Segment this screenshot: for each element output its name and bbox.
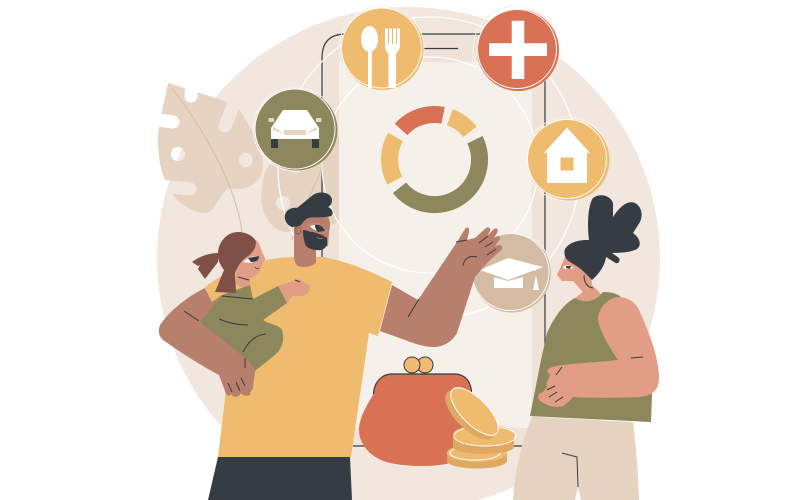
hair: [564, 195, 642, 280]
icon: car: [253, 87, 338, 171]
face: [297, 217, 330, 246]
icon: fork and spoon: [339, 6, 424, 91]
purse clasp: [404, 357, 433, 373]
background circle: [157, 7, 660, 500]
top: [530, 292, 652, 422]
segment: red: [401, 114, 443, 129]
woman: [513, 195, 659, 500]
trousers: [513, 417, 639, 500]
phone side band: [322, 34, 545, 446]
hair: [215, 232, 256, 293]
icon: graduation cap: [470, 232, 551, 312]
purse: [359, 357, 475, 466]
arm creases: [184, 311, 245, 392]
leaf vein: [172, 88, 242, 232]
mouth: [317, 237, 323, 239]
ponytail: [192, 253, 218, 279]
eye: [308, 223, 328, 233]
man arm holding child: [159, 288, 255, 397]
segment: olive: [400, 140, 480, 205]
small leaf: [261, 135, 339, 240]
neck and face: [557, 250, 603, 302]
hair: [285, 193, 333, 227]
phone screen: [339, 62, 532, 428]
large leaf: [158, 83, 263, 232]
icon: house: [525, 117, 610, 201]
tilted coin: [437, 382, 503, 448]
orbit rings: [278, 17, 580, 319]
neck and face: [236, 240, 265, 287]
neck: [294, 225, 316, 267]
segment: yellow left: [390, 137, 396, 181]
phone: [322, 34, 545, 446]
ear: [296, 227, 301, 234]
eye: [563, 265, 574, 269]
man: [205, 193, 502, 500]
segment: yellow top: [450, 117, 470, 132]
eye: [243, 256, 258, 263]
shirt: [205, 257, 392, 457]
arm creases: [547, 357, 643, 402]
mouth: [255, 267, 259, 269]
purse body: [359, 374, 475, 466]
phone outline: [322, 34, 545, 446]
beard: [303, 230, 327, 250]
middle coin: [453, 435, 514, 454]
child: [159, 232, 310, 397]
icon: medical cross: [473, 6, 559, 92]
hair strand: [584, 275, 593, 288]
bottom coin: [447, 453, 507, 468]
arm: [538, 297, 659, 407]
donut chart: [390, 114, 480, 205]
forward arm: [380, 227, 502, 347]
arm creases: [408, 236, 496, 317]
coins: [437, 380, 516, 468]
child body: [200, 285, 287, 390]
trousers: [208, 457, 352, 500]
child clothes creases: [219, 277, 300, 352]
child hand: [278, 280, 310, 303]
